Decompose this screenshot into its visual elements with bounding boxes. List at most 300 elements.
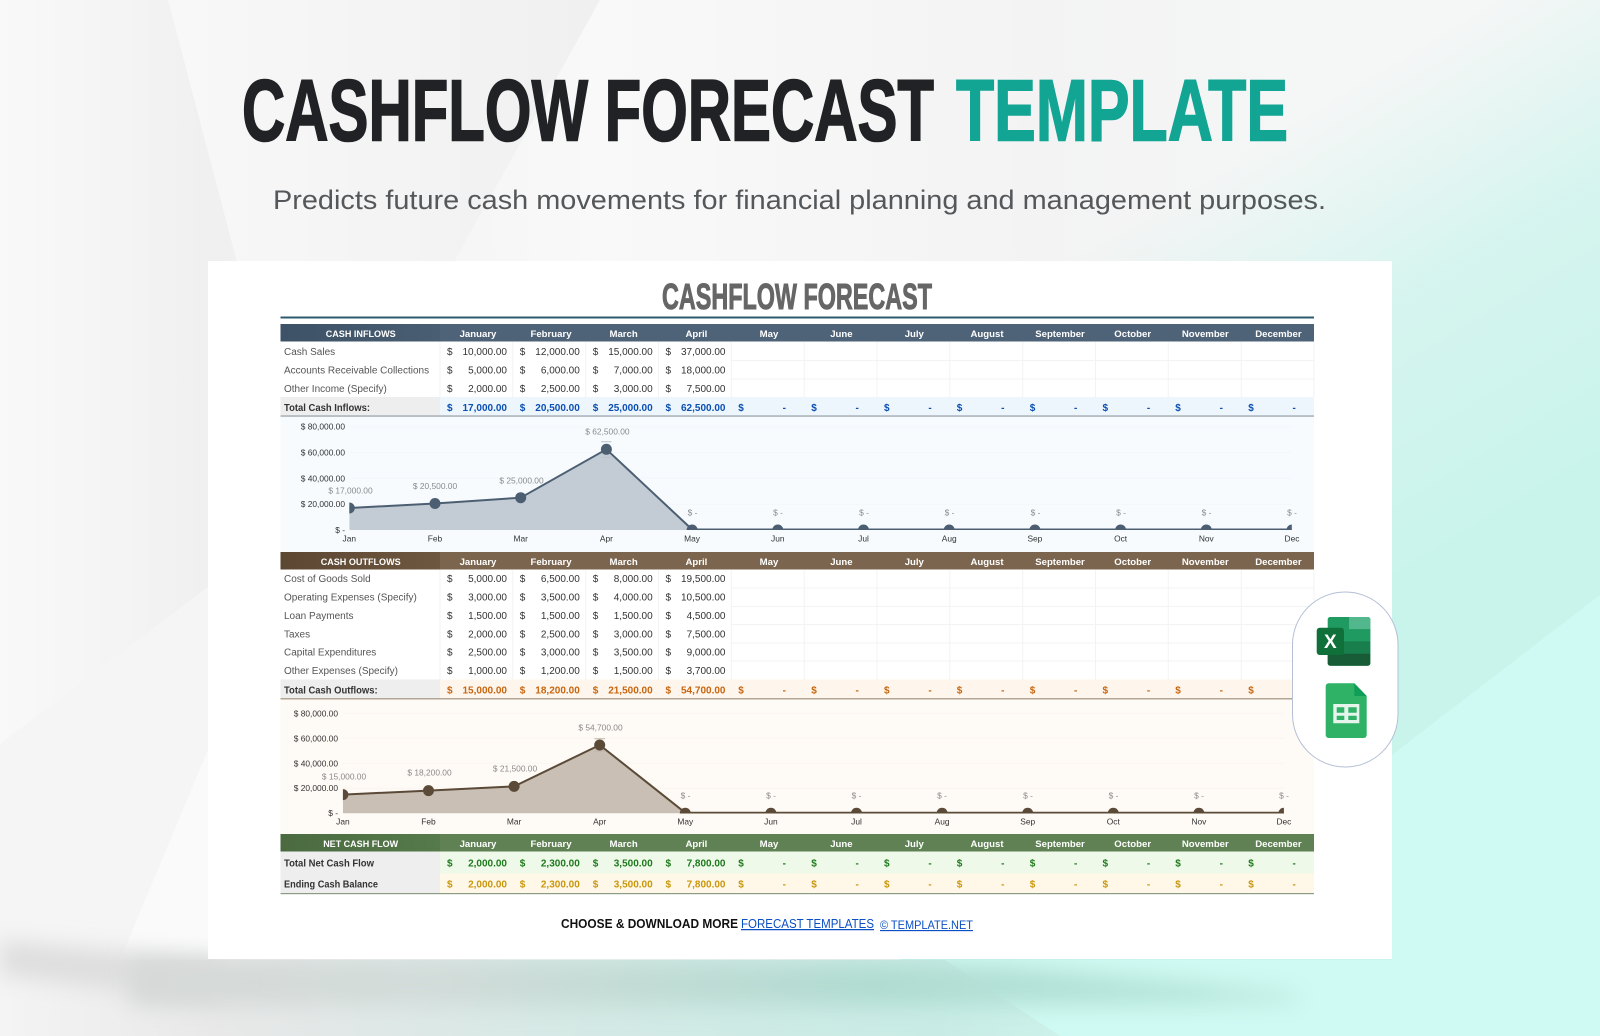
net header row: September: [1035, 839, 1085, 850]
row: loan payments: 1,500.00: [541, 611, 580, 622]
outflows month axis: Aug: [935, 816, 950, 826]
inflows month axis: May: [684, 533, 701, 543]
row: total net cash flow: $: [811, 858, 817, 870]
sheet title: CASHFLOW FORECAST: [662, 276, 932, 317]
inflows data labels: $ -: [1031, 508, 1041, 518]
inflows month axis: Jan: [343, 533, 356, 543]
row: total cash outflows: -: [856, 685, 859, 696]
row: total cash outflows: 54,700.00: [681, 685, 726, 696]
row: capital expenditures: 3,500.00: [614, 648, 653, 659]
row: operating expenses: Operating Expenses (Specify): [284, 593, 417, 604]
row: ending cash balance: $: [884, 880, 890, 890]
row: loan payments: $: [447, 611, 453, 622]
row: total net cash flow: $: [1248, 858, 1254, 870]
row: cost of goods sold: $: [447, 574, 453, 585]
row: taxes: $: [593, 629, 599, 640]
row: total cash inflows: -: [1001, 403, 1004, 414]
row: total net cash flow: 3,500.00: [614, 858, 653, 870]
outflows data labels: $ -: [852, 790, 862, 800]
outflows data labels: $ -: [1023, 790, 1033, 800]
row: total cash inflows: -: [1293, 403, 1296, 414]
row: taxes: $: [520, 629, 526, 640]
inflows month axis: Jul: [858, 533, 869, 543]
row: total net cash flow: $: [666, 858, 672, 870]
row: other income: [284, 384, 726, 395]
row: loan payments: [284, 611, 726, 622]
icon: excel: [1317, 617, 1370, 666]
row: total cash inflows: $: [593, 403, 599, 414]
row: capital expenditures: 2,500.00: [468, 648, 507, 659]
row: capital expenditures: $: [447, 648, 453, 659]
row: total cash inflows: Total Cash Inflows:: [284, 403, 370, 414]
row: total net cash flow: -: [1074, 858, 1077, 870]
row: taxes: $: [447, 629, 453, 640]
row: cash sales: 10,000.00: [462, 347, 507, 358]
row: total cash outflows: $: [957, 685, 963, 696]
net header row: May: [760, 839, 779, 850]
row: ending cash balance: $: [1175, 880, 1181, 890]
row: total net cash flow: $: [593, 858, 599, 870]
row: ending cash balance: -: [1001, 880, 1004, 890]
inflows data labels: $ -: [945, 508, 955, 518]
row: total net cash flow: -: [1001, 858, 1004, 870]
main title: CASHFLOW FORECAST: [242, 62, 934, 160]
row: total cash inflows: -: [1147, 403, 1150, 414]
row: total cash inflows: $: [1030, 403, 1036, 414]
row: other income: 2,500.00: [541, 384, 580, 395]
outflows month axis: Jul: [851, 816, 862, 826]
row: loan payments: 1,500.00: [614, 611, 653, 622]
row: capital expenditures: $: [520, 648, 526, 659]
outflows y axis labels: $ 80,000.00: [294, 708, 338, 718]
outflows header row: January: [460, 557, 497, 568]
chart: cash inflows area chart: [280, 417, 1314, 552]
row: cost of goods sold: $: [520, 574, 526, 585]
outflows data labels: $ -: [1194, 790, 1204, 800]
row: cash sales: Cash Sales: [284, 347, 335, 358]
row: capital expenditures: $: [593, 648, 599, 659]
inflows month axis: Oct: [1114, 533, 1128, 543]
row: total cash inflows: $: [738, 403, 744, 414]
row: ending cash balance: -: [783, 880, 786, 890]
row: operating expenses: $: [666, 593, 672, 604]
row: total cash inflows: $: [884, 403, 890, 414]
row: other income: 7,500.00: [687, 384, 726, 395]
row: cash sales: $: [593, 347, 599, 358]
row: cash sales: 37,000.00: [681, 347, 726, 358]
row: loan payments: $: [666, 611, 672, 622]
row: accounts receivable: $: [593, 366, 599, 376]
row: accounts receivable: 7,000.00: [614, 366, 653, 376]
row: other income: $: [593, 384, 599, 395]
row: cash sales: 15,000.00: [608, 347, 653, 358]
row: ending cash balance: 7,800.00: [687, 880, 726, 890]
row: cash sales: $: [520, 347, 526, 358]
row: ending cash balance: 2,000.00: [468, 880, 507, 890]
main title: TEMPLATE: [956, 62, 1288, 160]
panel: app icons pill: [1292, 592, 1398, 767]
row: total net cash flow: -: [783, 858, 786, 870]
row: total cash inflows: 62,500.00: [681, 403, 726, 414]
outflows header row: November: [1182, 557, 1229, 568]
row: taxes: 2,500.00: [541, 629, 580, 640]
row: other expenses: [284, 666, 726, 677]
row: operating expenses: 3,000.00: [468, 593, 507, 604]
net header row: December: [1255, 839, 1302, 850]
row: total cash outflows: -: [1220, 685, 1223, 696]
inflows data labels: $ 20,500.00: [413, 481, 457, 491]
outflows month axis: Dec: [1276, 816, 1291, 826]
inflows header row: October: [1114, 329, 1151, 340]
row: ending cash balance: $: [447, 880, 453, 890]
inflows data labels: [328, 427, 1297, 518]
outflows month axis: Jan: [336, 816, 350, 826]
row: accounts receivable: 18,000.00: [681, 366, 726, 376]
row: cash sales: $: [447, 347, 453, 358]
inflows month axis: Dec: [1285, 533, 1299, 543]
row: total cash outflows: $: [1248, 685, 1254, 696]
outflows header row: December: [1255, 557, 1302, 568]
row: other expenses: $: [593, 666, 599, 677]
row: taxes: 2,000.00: [468, 629, 507, 640]
outflows month axis: Sep: [1020, 816, 1035, 826]
net header row: April: [685, 839, 707, 850]
footer link line: CHOOSE & DOWNLOAD MORE: [561, 917, 738, 931]
row: total cash outflows: 21,500.00: [608, 685, 653, 696]
row: taxes: 3,000.00: [614, 629, 653, 640]
row: accounts receivable: 5,000.00: [468, 366, 507, 376]
outflows month axis: Oct: [1107, 816, 1120, 826]
row: total net cash flow: $: [738, 858, 744, 870]
inflows header row: March: [609, 329, 638, 340]
outflows month axis: May: [677, 816, 694, 826]
row: total cash inflows: -: [783, 403, 786, 414]
row: cash sales: [284, 347, 726, 358]
row: total net cash flow: -: [928, 858, 932, 870]
net header row: [323, 839, 1302, 850]
net header row: NET CASH FLOW: [323, 839, 399, 850]
row: ending cash balance: -: [928, 880, 932, 890]
row: total cash outflows: Total Cash Outflows:: [284, 685, 378, 696]
net header row: November: [1182, 839, 1229, 850]
row: total cash outflows: -: [783, 685, 786, 696]
inflows y axis labels: $ 80,000.00: [301, 422, 345, 432]
row: ending cash balance: -: [1074, 880, 1077, 890]
footer link line: FORECAST TEMPLATES: [741, 917, 874, 931]
outflows data labels: $ -: [937, 790, 947, 800]
row: total net cash flow: -: [1147, 858, 1150, 870]
inflows area and line: [344, 442, 1298, 536]
row: total cash outflows: -: [928, 685, 932, 696]
outflows header row: April: [685, 557, 707, 568]
row: capital expenditures: 3,000.00: [541, 648, 580, 659]
outflows y axis labels: [294, 708, 338, 818]
row: other income: $: [520, 384, 526, 395]
inflows header row: January: [460, 329, 497, 340]
row: taxes: Taxes: [284, 629, 310, 640]
inflows data labels: $ 17,000.00: [328, 485, 373, 495]
inflows header row: February: [530, 329, 572, 340]
inflows data labels: $ 62,500.00: [585, 427, 630, 437]
row: taxes: 7,500.00: [687, 629, 726, 640]
outflows data labels: $ 15,000.00: [322, 772, 366, 782]
row: total cash inflows: [280, 397, 1314, 417]
inflows y axis labels: $ 40,000.00: [301, 473, 345, 483]
row: total net cash flow: 2,000.00: [468, 858, 507, 870]
inflows data labels: $ -: [773, 508, 783, 518]
row: loan payments: 4,500.00: [687, 611, 726, 622]
inflows month axis: Aug: [942, 533, 957, 543]
row: loan payments: Loan Payments: [284, 611, 354, 622]
inflows y axis labels: [301, 422, 345, 535]
row: cost of goods sold: 8,000.00: [614, 574, 653, 585]
row: ending cash balance: $: [957, 880, 963, 890]
outflows y axis labels: $ -: [328, 808, 338, 818]
row: loan payments: $: [520, 611, 526, 622]
row: ending cash balance: $: [811, 880, 817, 890]
outflows month axis: Apr: [593, 816, 606, 826]
row: total net cash flow: $: [884, 858, 890, 870]
row: accounts receivable: [284, 366, 726, 376]
net header row: October: [1114, 839, 1151, 850]
row: operating expenses: $: [520, 593, 526, 604]
row: total net cash flow: $: [957, 858, 963, 870]
row: operating expenses: 3,500.00: [541, 593, 580, 604]
row: total net cash flow: Total Net Cash Flow: [284, 858, 374, 870]
row: ending cash balance: 3,500.00: [614, 880, 653, 890]
inflows data labels: $ -: [859, 508, 869, 518]
net header row: July: [905, 839, 925, 850]
row: loan payments: 1,500.00: [468, 611, 507, 622]
row: ending cash balance: $: [666, 880, 672, 890]
outflows header row: September: [1035, 557, 1085, 568]
row: total cash outflows: $: [520, 685, 526, 696]
row: total cash inflows: $: [666, 403, 672, 414]
inflows header row: April: [685, 329, 707, 340]
outflows month axis: Jun: [764, 816, 778, 826]
outflows data labels: $ 54,700.00: [578, 722, 623, 732]
row: cash sales: 12,000.00: [535, 347, 580, 358]
row: other income: 3,000.00: [614, 384, 653, 395]
net header row: March: [609, 839, 638, 850]
outflows header row: [321, 557, 1302, 568]
panel: net cash flow table: [280, 834, 1314, 894]
row: cost of goods sold: 19,500.00: [681, 574, 726, 585]
row: ending cash balance: [284, 880, 1296, 890]
outflows y axis labels: $ 20,000.00: [294, 783, 338, 793]
row: taxes: $: [666, 629, 672, 640]
row: operating expenses: 4,000.00: [614, 593, 653, 604]
row: operating expenses: $: [593, 593, 599, 604]
outflows header row: October: [1114, 557, 1151, 568]
row: total cash inflows: 20,500.00: [535, 403, 580, 414]
outflows data labels: [322, 722, 1289, 800]
row: ending cash balance: -: [856, 880, 859, 890]
icon: google sheets: [1326, 683, 1367, 738]
row: capital expenditures: 9,000.00: [687, 648, 726, 659]
row: total cash outflows: 18,200.00: [535, 685, 580, 696]
outflows data labels: $ -: [1109, 790, 1119, 800]
row: total cash inflows: $: [520, 403, 526, 414]
row: total cash outflows: -: [1001, 685, 1004, 696]
row: ending cash balance: -: [1293, 880, 1296, 890]
inflows y axis labels: $ 20,000.00: [301, 499, 345, 509]
row: total net cash flow: $: [1102, 858, 1108, 870]
row: total cash outflows: $: [738, 685, 744, 696]
outflows data labels: $ -: [681, 790, 691, 800]
row: total cash outflows: $: [1030, 685, 1036, 696]
outflows data labels: $ 21,500.00: [493, 764, 537, 774]
inflows header row: July: [905, 329, 925, 340]
inflows header row: CASH INFLOWS: [326, 329, 396, 340]
net header row: June: [830, 839, 853, 850]
inflows header row: May: [760, 329, 779, 340]
row: total cash inflows: 17,000.00: [462, 403, 507, 414]
row: total net cash flow: $: [1030, 858, 1036, 870]
row: ending cash balance: $: [1102, 880, 1108, 890]
row: total cash inflows: $: [1248, 403, 1254, 414]
row: total net cash flow: -: [1220, 858, 1223, 870]
row: accounts receivable: 6,000.00: [541, 366, 580, 376]
row: total cash outflows: $: [447, 685, 453, 696]
row: total cash outflows: $: [593, 685, 599, 696]
inflows y axis labels: $ 60,000.00: [301, 448, 345, 458]
row: ending cash balance: Ending Cash Balance: [284, 880, 378, 890]
row: total cash outflows: $: [666, 685, 672, 696]
row: ending cash balance: -: [1220, 880, 1223, 890]
outflows data labels: $ -: [766, 790, 776, 800]
inflows header row: September: [1035, 329, 1085, 340]
inflows month axis: Jun: [771, 533, 785, 543]
row: capital expenditures: [284, 648, 726, 659]
panel: cash inflows table: [280, 324, 1314, 417]
row: total cash inflows: $: [957, 403, 963, 414]
inflows data labels: $ -: [1116, 508, 1126, 518]
row: other income: $: [447, 384, 453, 395]
inflows data labels: $ -: [688, 508, 698, 518]
row: total cash inflows: $: [1102, 403, 1108, 414]
inflows data labels: $ 25,000.00: [499, 475, 544, 485]
footer link line: © TEMPLATE.NET: [880, 920, 973, 932]
footer link line: [561, 917, 973, 932]
outflows month axis: [336, 816, 1291, 826]
panel: spreadsheet card: [208, 261, 1392, 959]
row: operating expenses: 10,500.00: [681, 593, 726, 604]
outflows month axis: Feb: [421, 816, 436, 826]
inflows header row: June: [830, 329, 853, 340]
inflows data labels: $ -: [1287, 508, 1297, 518]
row: total cash outflows: 15,000.00: [462, 685, 507, 696]
outflows header row: CASH OUTFLOWS: [321, 557, 401, 568]
row: taxes: [284, 629, 726, 640]
row: ending cash balance: $: [738, 880, 744, 890]
row: total cash inflows: $: [447, 403, 453, 414]
outflows header row: March: [609, 557, 638, 568]
row: other income: $: [666, 384, 672, 395]
row: accounts receivable: $: [666, 366, 672, 376]
net header row: August: [970, 839, 1004, 850]
row: total cash outflows: -: [1293, 685, 1296, 696]
row: other income: 2,000.00: [468, 384, 507, 395]
row: ending cash balance: $: [593, 880, 599, 890]
row: accounts receivable: $: [520, 366, 526, 376]
row: cost of goods sold: [284, 574, 726, 585]
inflows month axis: Feb: [428, 533, 443, 543]
row: accounts receivable: $: [447, 366, 453, 376]
row: ending cash balance: 2,300.00: [541, 880, 580, 890]
row: other expenses: 1,200.00: [541, 666, 580, 677]
outflows y axis labels: $ 60,000.00: [294, 733, 338, 743]
row: total net cash flow: 2,300.00: [541, 858, 580, 870]
inflows y axis labels: $ -: [335, 525, 345, 535]
inflows month axis: Sep: [1027, 533, 1043, 543]
net header row: January: [460, 839, 497, 850]
panel: cash outflows table: [280, 552, 1314, 700]
inflows month axis: Nov: [1199, 533, 1215, 543]
row: total cash inflows: $: [1175, 403, 1181, 414]
row: total net cash flow: [284, 858, 1296, 870]
row: capital expenditures: $: [666, 648, 672, 659]
row: total cash outflows: -: [1074, 685, 1077, 696]
icon: excel: X: [1324, 632, 1337, 653]
row: cost of goods sold: Cost of Goods Sold: [284, 574, 371, 585]
row: other expenses: $: [447, 666, 453, 677]
row: cost of goods sold: $: [666, 574, 672, 585]
row: other expenses: 3,700.00: [687, 666, 726, 677]
inflows header row: November: [1182, 329, 1229, 340]
row: total cash inflows: $: [811, 403, 817, 414]
row: total cash inflows: -: [856, 403, 859, 414]
inflows month axis: [343, 533, 1299, 543]
outflows area and line: [337, 739, 1289, 819]
row: operating expenses: $: [447, 593, 453, 604]
row: other expenses: Other Expenses (Specify): [284, 666, 398, 677]
row: total cash inflows: 25,000.00: [608, 403, 653, 414]
row: total net cash flow: $: [520, 858, 526, 870]
subtitle: Predicts future cash movements for financial planning and management purposes.: [273, 185, 1326, 215]
inflows header row: December: [1255, 329, 1302, 340]
row: cost of goods sold: 6,500.00: [541, 574, 580, 585]
row: total cash outflows: $: [811, 685, 817, 696]
row: other expenses: 1,500.00: [614, 666, 653, 677]
inflows header row: [326, 329, 1302, 340]
outflows header row: May: [760, 557, 779, 568]
row: operating expenses: [284, 593, 726, 604]
outflows header row: June: [830, 557, 853, 568]
row: total cash inflows: -: [928, 403, 932, 414]
row: total cash outflows: [280, 680, 1314, 700]
outflows data labels: $ 18,200.00: [407, 768, 452, 778]
inflows data labels: $ -: [1202, 508, 1212, 518]
row: other income: Other Income (Specify): [284, 384, 387, 395]
chart: cash outflows area chart: [280, 700, 1314, 834]
inflows header row: August: [970, 329, 1004, 340]
row: total cash outflows: $: [1175, 685, 1181, 696]
row: total cash outflows: -: [1147, 685, 1150, 696]
row: total cash inflows: -: [1074, 403, 1077, 414]
row: loan payments: $: [593, 611, 599, 622]
outflows header row: July: [905, 557, 925, 568]
row: cost of goods sold: $: [593, 574, 599, 585]
row: accounts receivable: Accounts Receivable Collections: [284, 366, 429, 376]
row: ending cash balance: $: [1030, 880, 1036, 890]
outflows data labels: $ -: [1279, 790, 1289, 800]
inflows month axis: Apr: [600, 533, 613, 543]
outflows month axis: Nov: [1191, 816, 1207, 826]
outflows header row: February: [530, 557, 572, 568]
row: total cash outflows: $: [884, 685, 890, 696]
row: other expenses: $: [666, 666, 672, 677]
